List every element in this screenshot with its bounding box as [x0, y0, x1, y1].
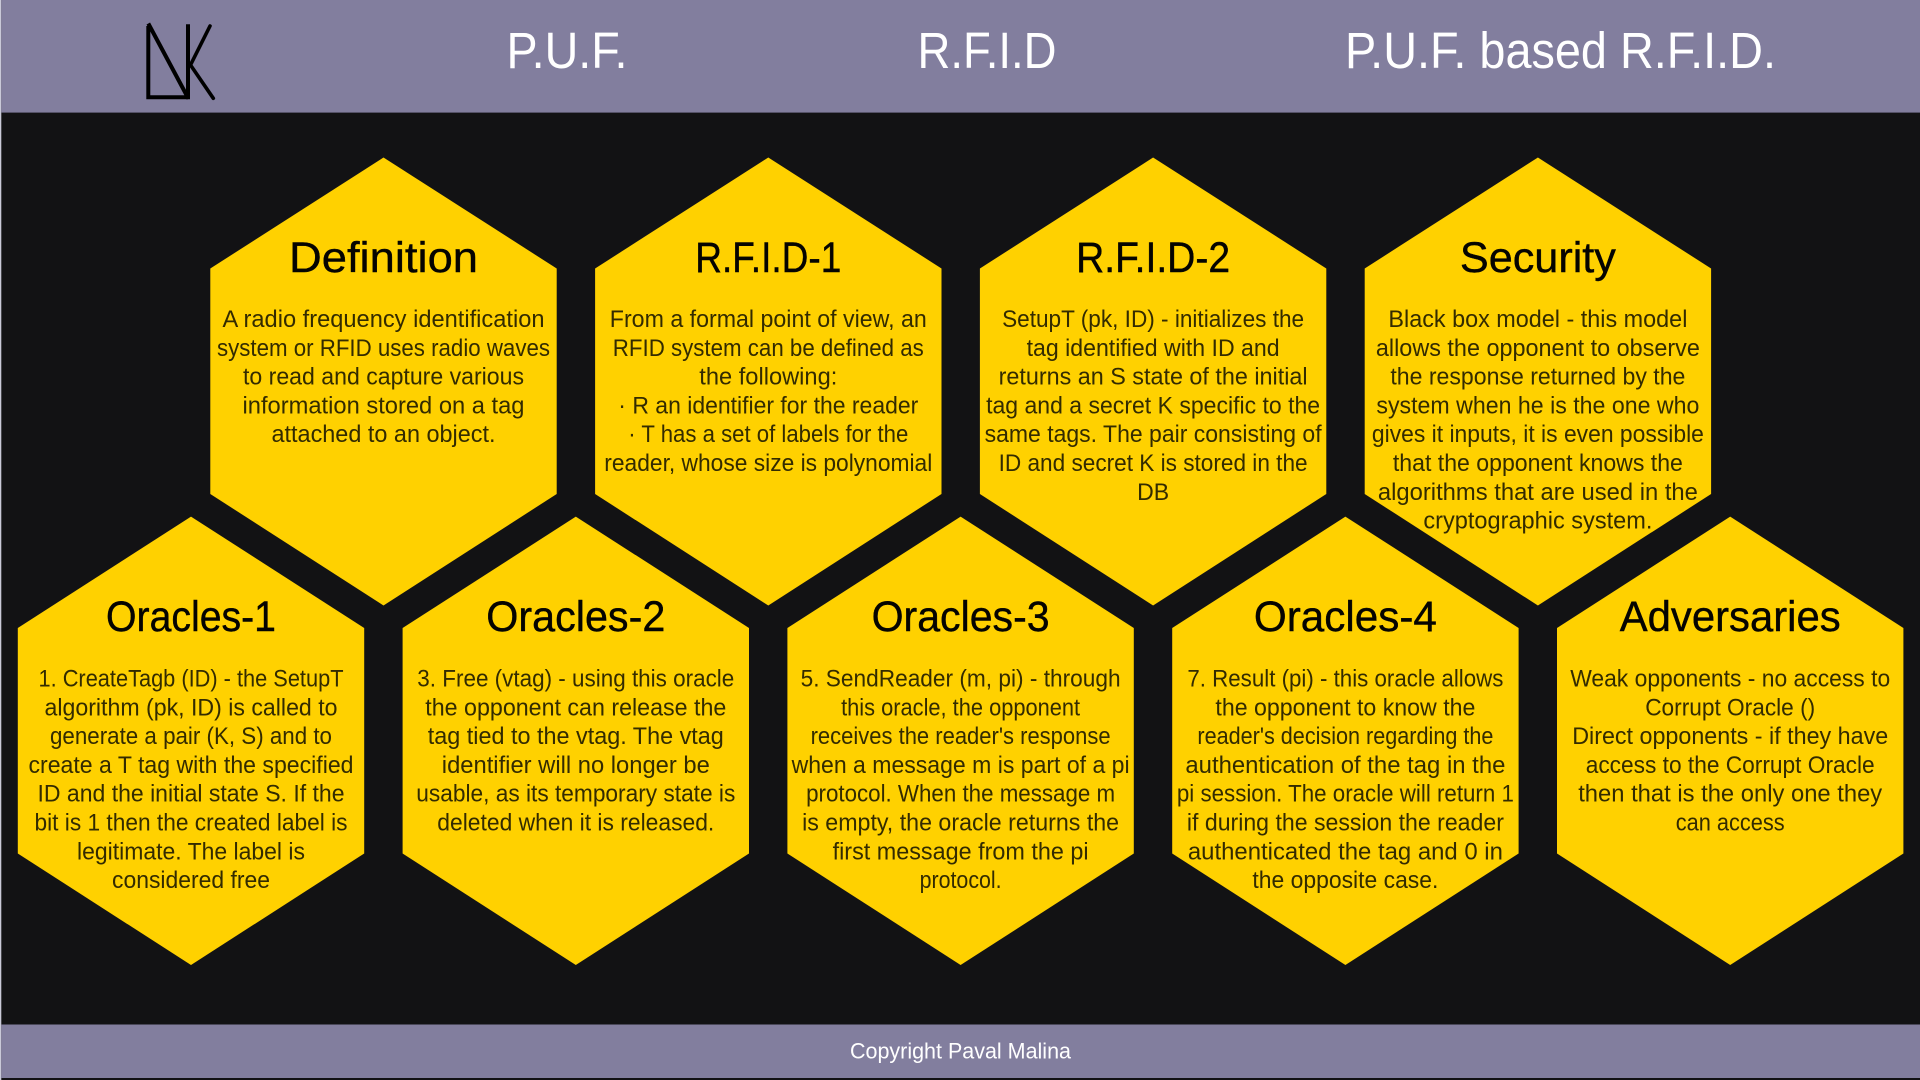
header bar	[1, 0, 1920, 113]
text block: R.F.I.D-1 body: reader, whose size is polynomial	[604, 450, 932, 477]
footer copyright text: Copyright Paval Malina	[850, 1038, 1072, 1064]
hexagon panel: R.F.I.D-1	[595, 158, 942, 606]
text block: Oracles-3 body: protocol.	[920, 867, 1002, 894]
text block: Security body: algorithms that are used in the	[1378, 479, 1698, 506]
text block: Oracles-4 body: if during the session the reader	[1187, 810, 1504, 836]
heading: Security: Security	[1460, 234, 1616, 282]
text block: Definition body: to read and capture various	[243, 364, 524, 391]
heading: R.F.I.D-2: R.F.I.D-2	[1076, 234, 1230, 282]
text block: R.F.I.D-2 body	[985, 306, 1322, 506]
text block: Oracles-1 body: bit is 1 then the created label is	[34, 810, 348, 836]
text block: Definition body: A radio frequency identification	[222, 306, 544, 333]
text block: Oracles-2 body: deleted when it is released.	[437, 810, 714, 836]
text block: Oracles-4 body: pi session. The oracle will return 1	[1177, 781, 1514, 808]
text block: Definition body: attached to an object.	[272, 421, 496, 448]
text block: Oracles-3 body: receives the reader's response	[811, 723, 1111, 750]
text block: R.F.I.D-1 body	[604, 306, 932, 477]
text block: Oracles-2 body: usable, as its temporary state is	[416, 781, 735, 808]
text block: R.F.I.D-1 body: From a formal point of view, an	[610, 306, 927, 333]
text block: Oracles-1 body: create a T tag with the specified	[28, 752, 354, 779]
footer bar	[1, 1024, 1920, 1078]
text block: Oracles-4 body: authenticated the tag and 0 in	[1188, 838, 1503, 865]
text block: Oracles-4 body: the opponent to know the	[1215, 694, 1475, 721]
text block: R.F.I.D-1 body: · T has a set of labels for the	[628, 421, 908, 448]
text block: Oracles-3 body: this oracle, the opponent	[841, 694, 1080, 721]
text block: R.F.I.D-2 body: tag identified with ID and	[1027, 335, 1280, 362]
text block: Adversaries body: Corrupt Oracle ()	[1645, 694, 1815, 721]
text block: R.F.I.D-1 body: the following:	[699, 364, 837, 391]
text block: Oracles-3 body: protocol. When the message m	[806, 781, 1115, 808]
text block: Security body: that the opponent knows the	[1393, 450, 1683, 477]
heading: Adversaries: Adversaries	[1620, 593, 1841, 641]
text block: Oracles-4 body: reader's decision regarding the	[1197, 723, 1493, 750]
text block: Oracles-4 body: the opposite case.	[1252, 867, 1438, 894]
text block: Adversaries body: then that is the only one they	[1578, 781, 1882, 808]
text block: Oracles-3 body	[791, 666, 1130, 894]
text block: Adversaries body: Direct opponents - if they have	[1572, 723, 1888, 750]
text block: R.F.I.D-2 body: DB	[1137, 479, 1169, 506]
text block: Adversaries body	[1570, 666, 1890, 836]
heading: Oracles-3: Oracles-3	[872, 593, 1050, 641]
hexagon panel: Oracles-2	[403, 517, 749, 965]
text block: R.F.I.D-1 body: RFID system can be defined as	[613, 335, 924, 362]
hexagon panel: R.F.I.D-2	[980, 158, 1326, 606]
text block: Security body: the response returned by the	[1390, 364, 1685, 391]
heading: Definition: Definition	[289, 234, 478, 282]
text block: Definition body	[217, 306, 550, 448]
text block: Oracles-1 body: generate a pair (K, S) and to	[50, 723, 332, 750]
heading: Oracles-2: Oracles-2	[486, 593, 665, 641]
text block: R.F.I.D-2 body: SetupT (pk, ID) - initializes the	[1002, 306, 1304, 333]
text block: Oracles-3 body: is empty, the oracle returns the	[802, 810, 1119, 836]
hexagon panel: Adversaries	[1557, 517, 1903, 965]
text block: Security body: gives it inputs, it is even possible	[1372, 421, 1704, 448]
text block: Oracles-2 body: the opponent can release the	[425, 694, 726, 721]
text block: Adversaries body: can access	[1676, 810, 1785, 836]
icon: NK logo	[148, 24, 213, 99]
hexagon panel: Oracles-1	[18, 517, 364, 965]
text block: Oracles-1 body: legitimate. The label is	[77, 838, 305, 865]
text block: Definition body: information stored on a tag	[242, 392, 524, 419]
nav: P.U.F. based R.F.I.D.: P.U.F. based R.F.I.D.	[1345, 22, 1776, 79]
hexagon panel: Definition	[210, 158, 557, 606]
text block: Oracles-3 body: 5. SendReader (m, pi) - through	[801, 666, 1121, 692]
hexagon panel: Oracles-3	[787, 517, 1134, 965]
text block: Oracles-4 body: 7. Result (pi) - this oracle allows	[1187, 666, 1503, 692]
text block: Oracles-2 body: tag tied to the vtag. The vtag	[428, 723, 724, 750]
text block: Oracles-3 body: first message from the pi	[833, 838, 1089, 865]
text block: Oracles-1 body: considered free	[112, 867, 270, 894]
hexagon panel: Security	[1365, 158, 1711, 606]
text block: Security body: Black box model - this model	[1388, 306, 1687, 333]
text block: Oracles-4 body	[1177, 666, 1514, 894]
text block: Adversaries body: Weak opponents - no access to	[1570, 666, 1890, 692]
text block: Oracles-1 body: 1. CreateTagb (ID) - the SetupT	[38, 666, 344, 692]
text block: R.F.I.D-2 body: returns an S state of the initial	[999, 364, 1308, 391]
heading: Oracles-4: Oracles-4	[1254, 593, 1437, 641]
text block: Adversaries body: access to the Corrupt Oracle	[1586, 752, 1875, 779]
text block: R.F.I.D-2 body: ID and secret K is stored in the	[999, 450, 1308, 477]
text block: Oracles-3 body: when a message m is part of a pi	[791, 752, 1130, 779]
text block: Oracles-2 body: identifier will no longer be	[442, 752, 710, 779]
text block: Security body: system when he is the one who	[1376, 392, 1699, 419]
text block: R.F.I.D-1 body: · R an identifier for the reader	[618, 392, 918, 419]
text block: Definition body: system or RFID uses radio waves	[217, 335, 550, 362]
text block: Oracles-1 body	[28, 666, 354, 894]
hexagon panel: Oracles-4	[1172, 517, 1519, 965]
text block: Security body: cryptographic system.	[1423, 508, 1652, 535]
text block: R.F.I.D-2 body: tag and a secret K specific to the	[986, 392, 1320, 419]
text block: Oracles-1 body: algorithm (pk, ID) is called to	[44, 694, 338, 721]
heading: Oracles-1: Oracles-1	[106, 593, 276, 641]
text block: Oracles-4 body: authentication of the tag in the	[1185, 752, 1505, 779]
text block: R.F.I.D-2 body: same tags. The pair consisting of	[985, 421, 1322, 448]
text block: Oracles-2 body: 3. Free (vtag) - using this oracle	[417, 666, 734, 692]
text block: Oracles-2 body	[416, 666, 735, 836]
heading: R.F.I.D-1: R.F.I.D-1	[695, 234, 841, 282]
nav: R.F.I.D: R.F.I.D	[918, 22, 1056, 79]
text block: Security body	[1372, 306, 1704, 535]
text block: Security body: allows the opponent to observe	[1376, 335, 1700, 362]
text block: Oracles-1 body: ID and the initial state S. If the	[38, 781, 344, 808]
nav: P.U.F.: P.U.F.	[506, 22, 628, 79]
